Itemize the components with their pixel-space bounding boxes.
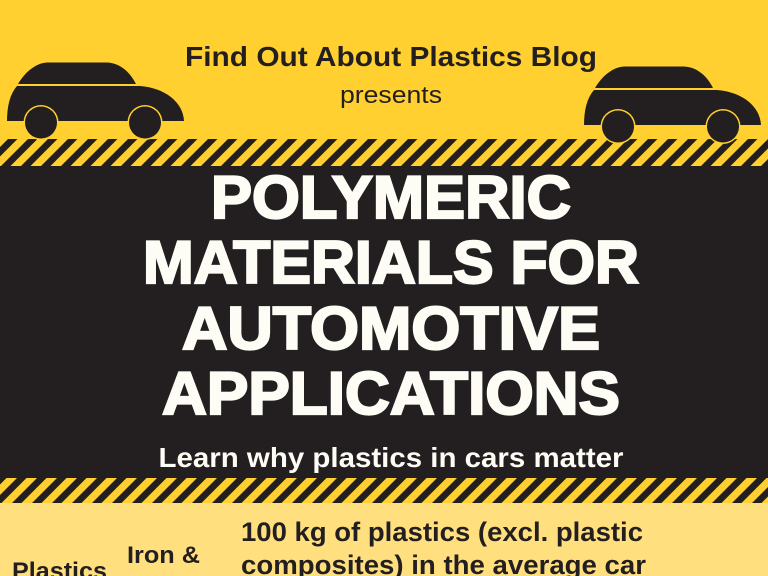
bottom hazard stripe band	[0, 478, 768, 503]
title: APPLICATIONS	[162, 360, 620, 427]
plastics weight callout	[241, 517, 647, 576]
plastics weight callout: 100 kg of plastics (excl. plastic	[241, 517, 643, 547]
chart label: iron and steel: Iron &	[127, 542, 200, 569]
top hazard stripe band	[0, 139, 768, 166]
icon: left car	[7, 62, 184, 140]
presents label: presents	[340, 82, 442, 109]
title: AUTOMOTIVE	[182, 295, 600, 362]
title: MATERIALS FOR	[143, 229, 639, 296]
title	[143, 164, 639, 427]
dark title panel	[0, 166, 768, 478]
subtitle: Learn why plastics in cars matter	[158, 442, 624, 473]
title: POLYMERIC	[211, 164, 571, 231]
light content panel	[0, 503, 768, 576]
icon: right car	[584, 66, 761, 144]
blog name heading: Find Out About Plastics Blog	[185, 41, 597, 72]
